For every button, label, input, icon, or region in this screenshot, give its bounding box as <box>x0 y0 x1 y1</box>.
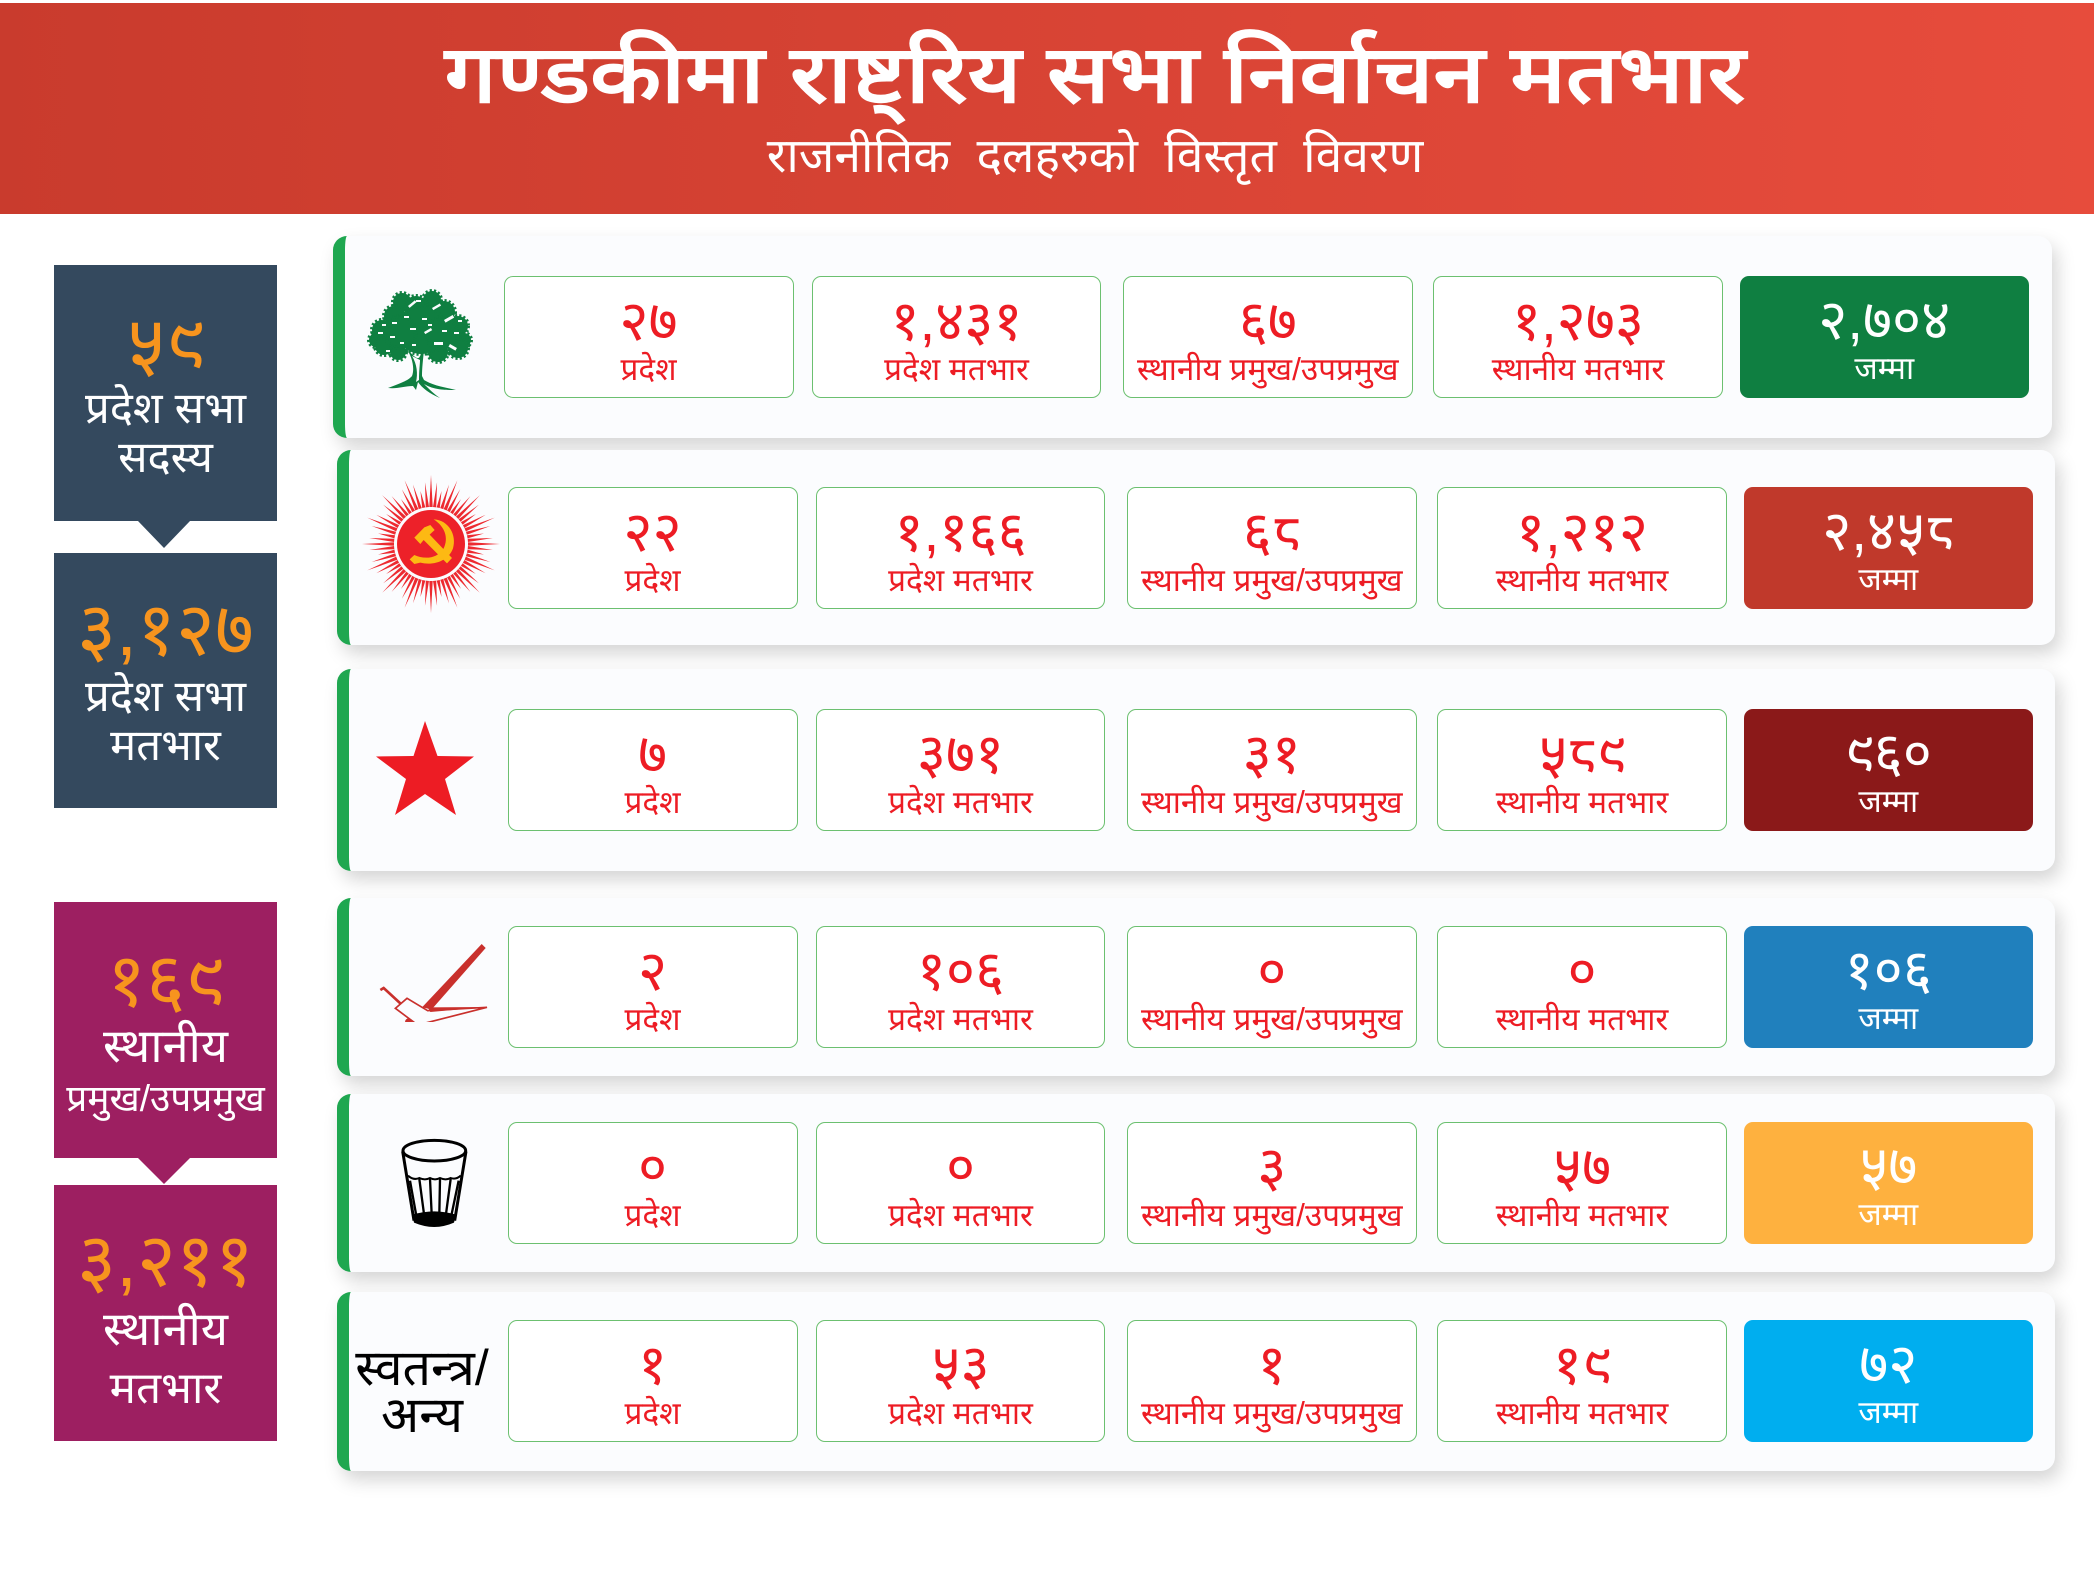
card: province count <box>504 276 794 398</box>
card: province votes: १,१६६ <box>894 500 1027 562</box>
row: tree party <box>330 236 2064 452</box>
card: total <box>1744 1122 2033 1244</box>
row: plough party <box>334 898 2068 1092</box>
card: local heads <box>1126 709 1417 831</box>
label: members: प्रदेश सभा <box>85 385 246 433</box>
card: local votes: १,२१२ <box>1516 500 1648 562</box>
card: local votes: स्थानीय मतभार <box>1496 562 1668 598</box>
card: total: २,७०४ <box>1818 288 1950 351</box>
card: province count: १ <box>638 1333 667 1396</box>
card: local heads: स्थानीय प्रमुख/उपप्रमुख <box>1137 351 1399 387</box>
card: local heads: स्थानीय प्रमुख/उपप्रमुख <box>1141 562 1403 598</box>
card: local heads: स्थानीय प्रमुख/उपप्रमुख <box>1141 1001 1403 1037</box>
card: province votes: प्रदेश मतभार <box>888 784 1033 820</box>
card: province count: ७ <box>638 722 667 785</box>
card: local votes: स्थानीय मतभार <box>1492 351 1664 387</box>
card: local heads <box>1126 926 1417 1048</box>
card: total: जम्मा <box>1858 1000 1918 1036</box>
card: local heads <box>1126 486 1417 608</box>
row: sun party <box>334 450 2068 662</box>
panel: local votes <box>54 1185 277 1441</box>
row: glass party <box>334 1094 2068 1288</box>
row: star party <box>334 669 2068 888</box>
panel: province votes <box>54 553 277 808</box>
card: local heads: स्थानीय प्रमुख/उपप्रमुख <box>1141 784 1403 820</box>
card: province votes: ० <box>946 1135 975 1198</box>
card: local votes <box>1437 1122 1727 1244</box>
label: independent / others <box>355 1340 489 1443</box>
row: independent / others <box>334 1292 2068 1488</box>
card: local votes: स्थानीय मतभार <box>1496 1001 1668 1037</box>
subtitle: राजनीतिक दलहरुको विस्तृत विवरण <box>767 130 1423 183</box>
card: province count <box>508 1320 798 1442</box>
number: local votes: ३,२११ <box>77 1218 254 1302</box>
card: province count <box>508 486 798 608</box>
card: province votes: ३७१ <box>917 722 1004 785</box>
card: province count: प्रदेश <box>624 1197 681 1233</box>
icon: plough <box>380 944 488 1022</box>
card: local heads: १ <box>1257 1333 1286 1396</box>
card: local heads: ६८ <box>1243 500 1301 562</box>
card: province votes: प्रदेश मतभार <box>884 351 1029 387</box>
card: local votes: १९ <box>1553 1333 1611 1396</box>
card: province count <box>508 709 798 831</box>
card: province count: प्रदेश <box>620 351 677 387</box>
card: local heads: स्थानीय प्रमुख/उपप्रमुख <box>1141 1197 1403 1233</box>
card: total: जम्मा <box>1854 350 1914 386</box>
card: local heads <box>1122 276 1413 398</box>
card: province votes: प्रदेश मतभार <box>888 1001 1033 1037</box>
card: local heads <box>1126 1320 1417 1442</box>
icon: glass <box>401 1138 468 1227</box>
panel: province assembly members <box>54 265 277 521</box>
label: province votes <box>85 672 247 770</box>
card: province votes: प्रदेश मतभार <box>888 1395 1033 1431</box>
card: province votes: १,४३१ <box>890 289 1023 352</box>
label: province votes: प्रदेश सभा <box>85 673 246 721</box>
card: province votes <box>812 276 1101 398</box>
card: local heads: ३१ <box>1243 722 1301 785</box>
card: local votes: ५८९ <box>1538 722 1626 785</box>
card: province votes <box>816 709 1105 831</box>
card: province votes <box>816 1122 1105 1244</box>
icon: sun with hammer and sickle <box>362 476 500 612</box>
card: province count: प्रदेश <box>624 1395 681 1431</box>
card: local votes <box>1437 486 1727 608</box>
number: members: ५९ <box>126 301 204 385</box>
card: total: ५७ <box>1859 1134 1917 1197</box>
card: province votes: प्रदेश मतभार <box>888 562 1033 598</box>
card: local heads: स्थानीय प्रमुख/उपप्रमुख <box>1141 1395 1403 1431</box>
card: total: जम्मा <box>1858 783 1918 819</box>
card: province count: २२ <box>623 500 682 562</box>
card: province count: २७ <box>619 289 678 352</box>
card: province count: प्रदेश <box>624 1001 681 1037</box>
panel: local heads <box>54 902 277 1158</box>
label: independent / others: स्वतन्त्र/ <box>355 1340 489 1396</box>
card: local votes: ० <box>1567 939 1597 1002</box>
card: province count: प्रदेश <box>624 562 681 598</box>
label: votes: मतभार <box>110 1364 221 1413</box>
card: province count <box>508 926 798 1048</box>
card: total: जम्मा <box>1858 560 1918 596</box>
card: province count: प्रदेश <box>624 784 681 820</box>
label: chief and deputy: प्रमुख/उपप्रमुख <box>66 1078 265 1119</box>
icon: red star <box>376 721 474 815</box>
label: local heads: स्थानीय <box>103 1019 228 1072</box>
card: local heads: ३ <box>1257 1135 1286 1198</box>
card: total <box>1744 486 2033 608</box>
card: total: ९६० <box>1845 721 1932 784</box>
card: province votes: प्रदेश मतभार <box>888 1197 1033 1233</box>
label: members <box>85 384 247 482</box>
label: province votes: मतभार <box>110 722 221 770</box>
card: province votes <box>816 926 1105 1048</box>
card: total: ७२ <box>1859 1332 1917 1395</box>
icon: tree <box>367 289 473 398</box>
card: local votes <box>1433 276 1723 398</box>
arrow: province down <box>138 521 190 548</box>
card: local votes <box>1437 1320 1727 1442</box>
card: local heads: ० <box>1257 939 1286 1002</box>
card: province votes: १०६ <box>917 939 1004 1002</box>
number: province votes: ३,१२७ <box>77 587 254 671</box>
title: गण्डकीमा राष्ट्रिय सभा निर्वाचन मतभार <box>445 30 1745 119</box>
card: total: जम्मा <box>1858 1394 1918 1430</box>
card: total: १०६ <box>1845 938 1932 1001</box>
label: members: सदस्य <box>118 434 213 482</box>
card: province count: ० <box>638 1135 667 1198</box>
card: province votes: ५३ <box>931 1333 990 1396</box>
card: province votes <box>816 486 1105 608</box>
card: local votes: ५७ <box>1553 1135 1611 1198</box>
number: local heads: १६९ <box>107 938 224 1022</box>
card: total <box>1744 1320 2033 1442</box>
card: local votes: स्थानीय मतभार <box>1496 1395 1668 1431</box>
card: province count <box>508 1122 798 1244</box>
header banner <box>0 3 2094 214</box>
card: total <box>1744 709 2033 831</box>
card: total <box>1744 926 2033 1048</box>
card: local votes: १,२७३ <box>1512 289 1644 352</box>
card: total: जम्मा <box>1858 1196 1918 1232</box>
card: local votes <box>1437 709 1727 831</box>
card: local votes <box>1437 926 1727 1048</box>
label: local votes: स्थानीय <box>103 1302 228 1355</box>
arrow: local down <box>138 1158 190 1184</box>
card: total <box>1740 276 2029 398</box>
card: local heads <box>1126 1122 1417 1244</box>
card: province votes <box>816 1320 1105 1442</box>
card: province count: २ <box>638 939 667 1002</box>
card: local heads: ६७ <box>1239 289 1297 352</box>
card: total: २,४५८ <box>1822 498 1954 562</box>
card: local votes: स्थानीय मतभार <box>1496 784 1668 820</box>
card: local votes: स्थानीय मतभार <box>1496 1197 1668 1233</box>
label: independent / others: अन्य <box>381 1387 463 1443</box>
